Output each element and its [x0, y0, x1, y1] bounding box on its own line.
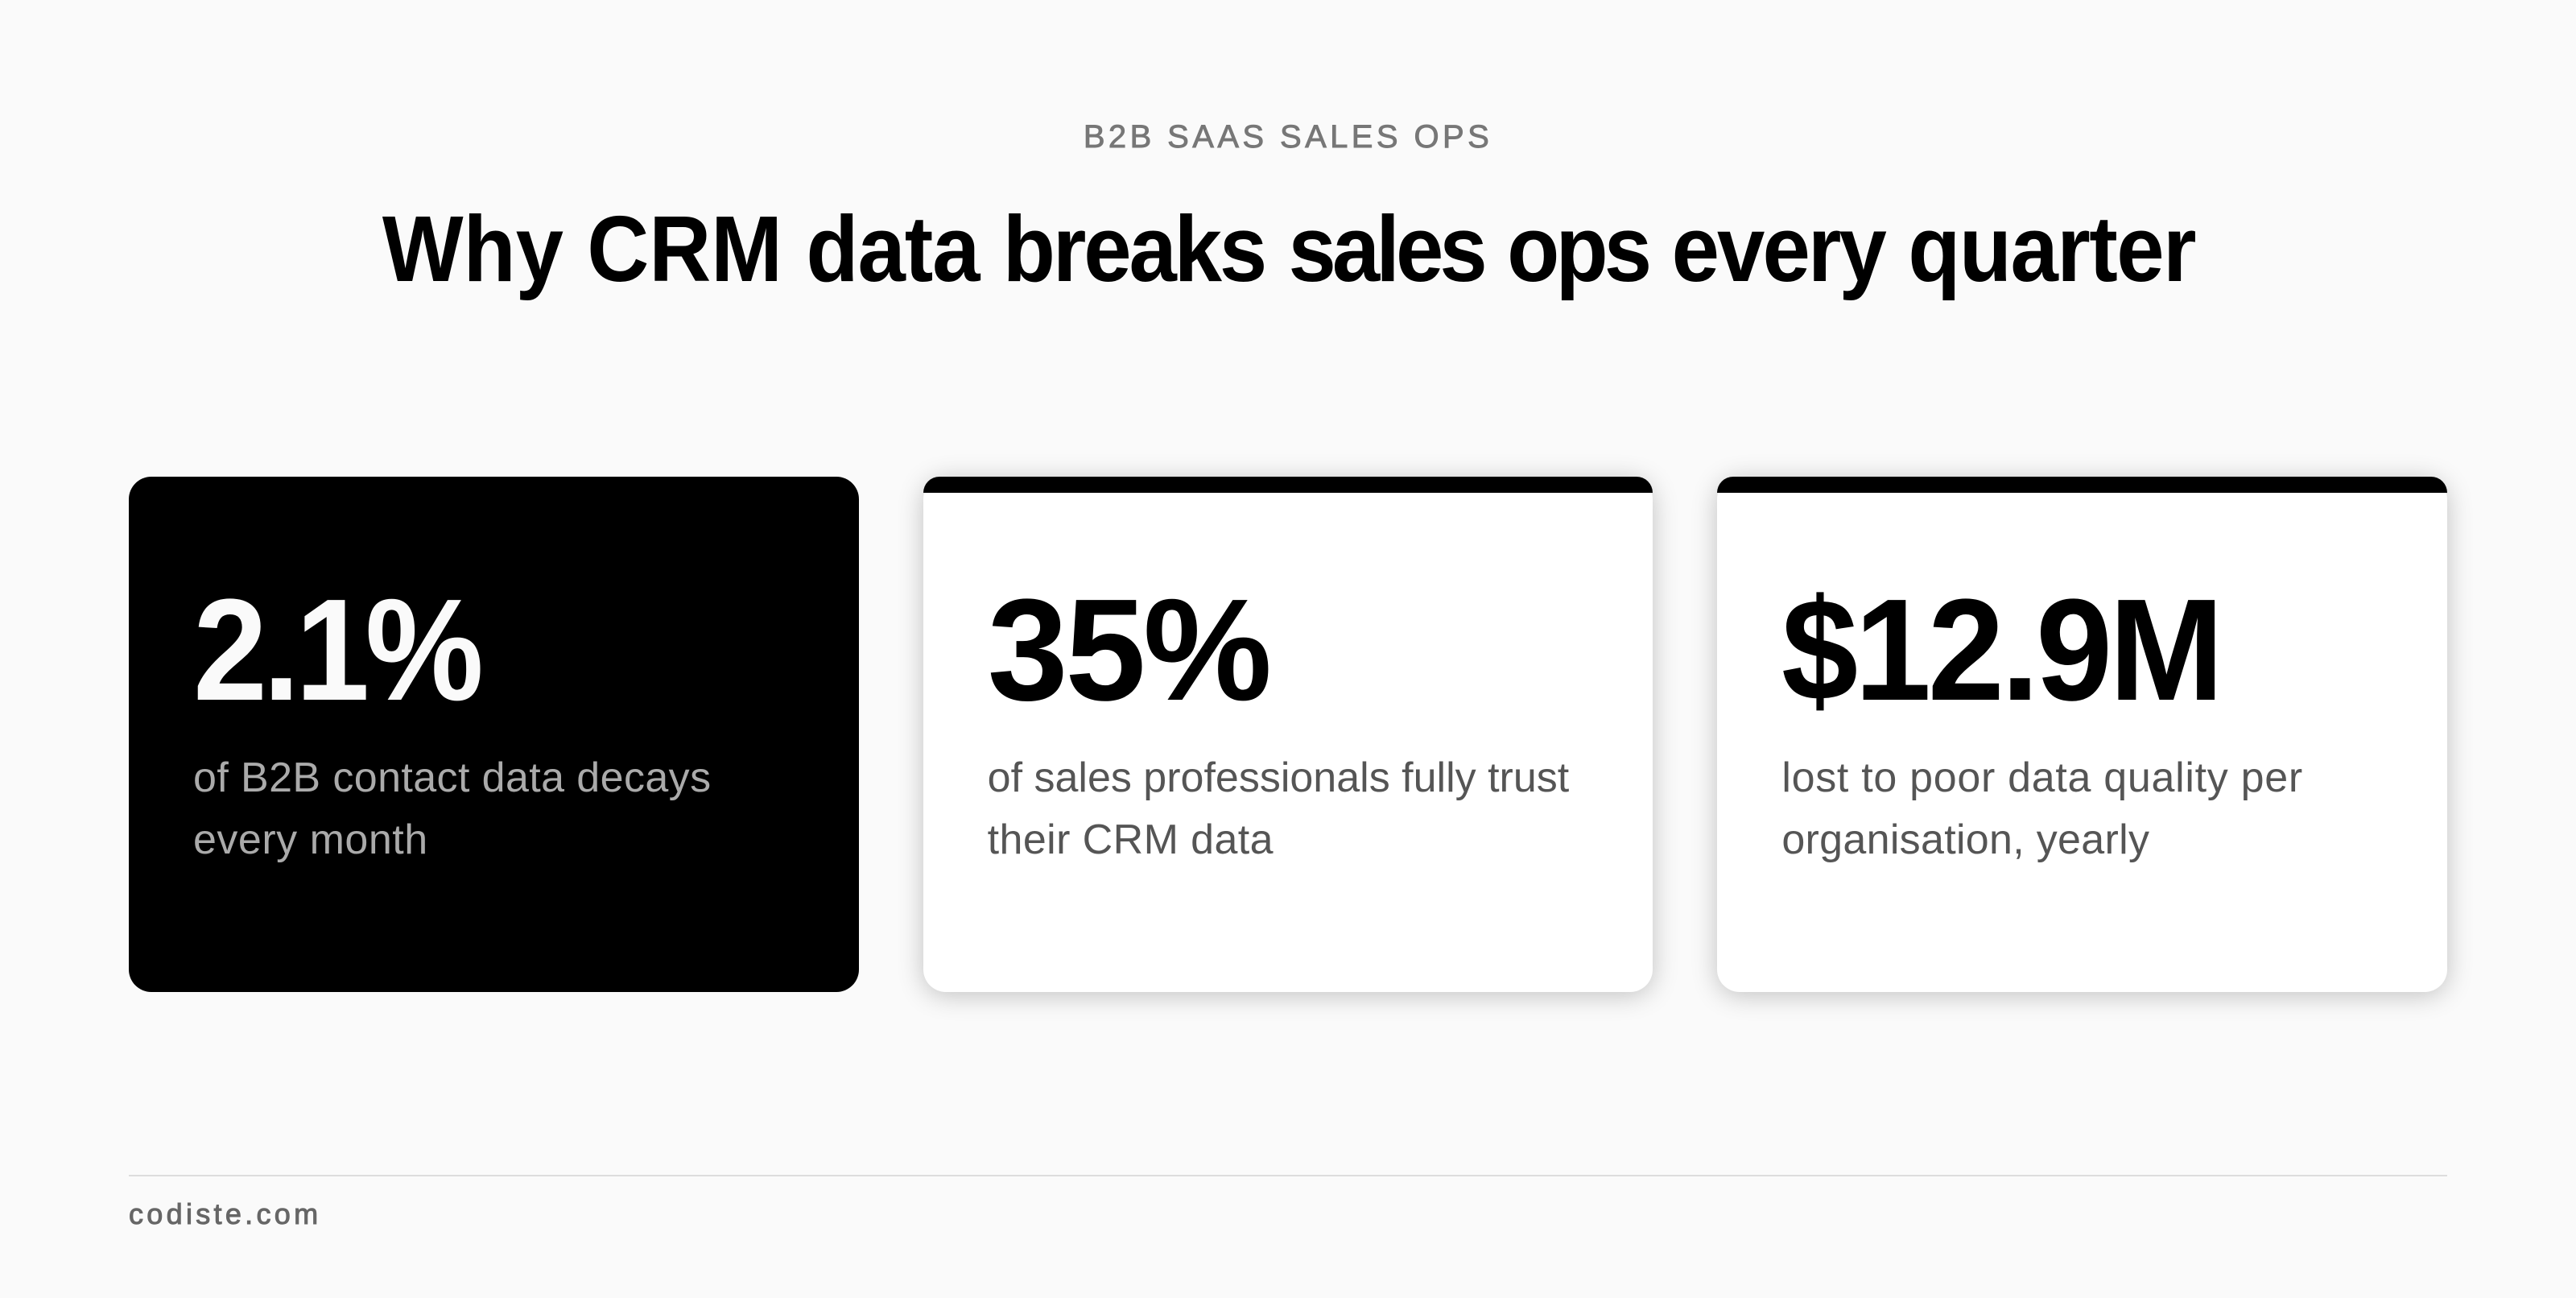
panel: cost of poor data stat [1717, 477, 2447, 992]
stat description: lost to poor data quality per [1781, 754, 2303, 801]
title: Why CRM data breaks sales ops every quarter [382, 196, 2195, 301]
stat description [1781, 754, 2303, 863]
panel: CRM trust stat [923, 477, 1653, 992]
stat number: 2.1%: 2.1% [193, 569, 479, 731]
stat description: their CRM data [988, 816, 1274, 863]
footer brand text: codiste.com [129, 1197, 321, 1230]
card top accent bar [1717, 477, 2447, 493]
card top accent bar [923, 477, 1653, 493]
stat description: every month [193, 816, 428, 863]
stat description: of sales professionals fully trust [988, 754, 1569, 801]
stat description: organisation, yearly [1781, 816, 2149, 863]
eyebrow label: B2B SAAS SALES OPS [1084, 119, 1492, 155]
stat description [193, 754, 711, 863]
stat number: 35%: 35% [988, 569, 1269, 731]
stat description [988, 754, 1569, 863]
stat number: $12.9M: $12.9M [1781, 569, 2221, 731]
stat description: of B2B contact data decays [193, 754, 711, 801]
footer divider [129, 1175, 2447, 1176]
panel: contact data decay stat [129, 477, 859, 992]
